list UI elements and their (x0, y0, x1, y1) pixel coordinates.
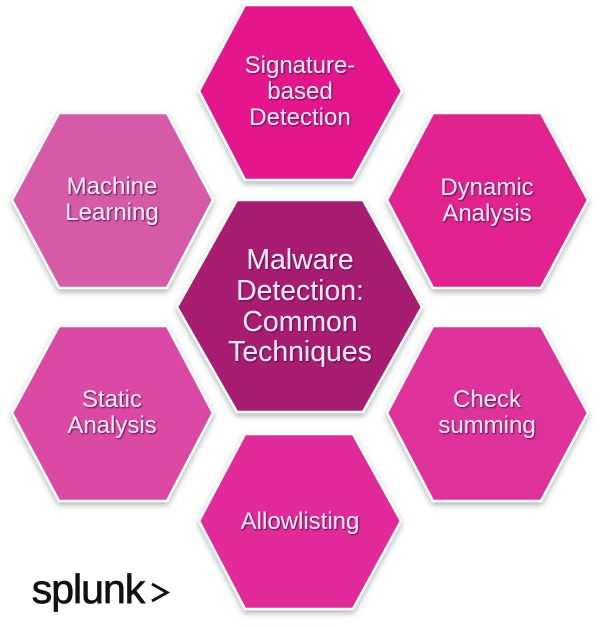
center hexagon: Malware Detection: Common Techniques: Detection: (236, 275, 364, 307)
center hexagon: Malware Detection: Common Techniques: Malware (246, 244, 354, 276)
hexagon: Signature-based Detection (199, 5, 402, 180)
hexagon: Check summing: summing (438, 412, 536, 439)
logo: splunk: splunk (32, 566, 146, 612)
hexagon: Static Analysis: Analysis (67, 412, 157, 439)
hexagon: Machine Learning (12, 113, 213, 288)
center hexagon: Malware Detection: Common Techniques: Common (242, 306, 358, 338)
hexagon: Check summing: Check (453, 386, 522, 413)
hexagon: Machine Learning: Learning (65, 199, 159, 226)
hexagon: Dynamic Analysis: Analysis (442, 200, 532, 227)
center hexagon: Malware Detection: Common Techniques (177, 200, 422, 412)
hexagon: Static Analysis: Static (82, 386, 142, 413)
center hexagon: Malware Detection: Common Techniques: Techniques (228, 336, 372, 368)
hexagon: Dynamic Analysis (387, 113, 588, 288)
hexagon: Signature-based Detection: based (267, 78, 333, 105)
hexagon: Signature-based Detection: Signature- (245, 52, 355, 79)
hexagon: Check summing (387, 326, 588, 501)
hexagon: Allowlisting: Allowlisting (241, 508, 359, 535)
hexagon: Machine Learning: Machine (67, 173, 157, 200)
hexagon: Signature-based Detection: Detection (249, 104, 351, 131)
hexagon: Allowlisting (199, 434, 401, 609)
hexagon: Dynamic Analysis: Dynamic (440, 174, 534, 201)
hexagon: Static Analysis (12, 326, 213, 501)
